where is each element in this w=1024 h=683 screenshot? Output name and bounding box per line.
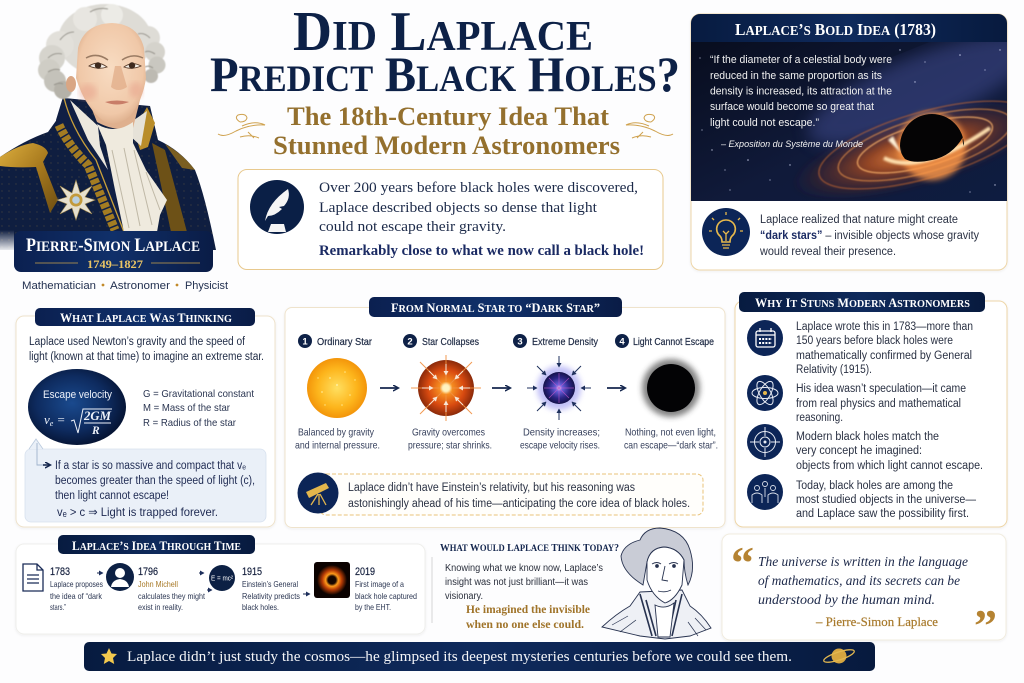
subtitle: The 18th-Century Idea That (287, 102, 609, 131)
engraving: Laplace sketch (602, 528, 711, 639)
space image with black hole (691, 42, 1007, 201)
arrow 1 (380, 387, 398, 389)
consequence callout: vₑ > c ⇒ Light is trapped forever. (57, 505, 218, 519)
step 1: ordinary star: 1 (302, 336, 308, 348)
panel: quote (722, 534, 1006, 651)
icon: light bulb (702, 208, 750, 256)
reason 4 (796, 480, 976, 520)
intro text: Over 200 years before black holes were discovered, (319, 180, 638, 196)
variables legend: G = Gravitational constant (143, 388, 254, 400)
flourish left (218, 114, 265, 138)
quote: “If the diameter of a celestial body were (710, 54, 892, 66)
dark stars text: would reveal their presence. (759, 246, 896, 258)
escape velocity formula: v (44, 412, 50, 427)
nose and mouth (111, 66, 127, 90)
step 3: extreme density: 3 (517, 336, 523, 348)
step 1: ordinary star: Balanced by gravity (298, 426, 375, 438)
heading pill: LAPLACE’S IDEA THROUGH TIME (72, 539, 241, 553)
1915 milestone (242, 566, 300, 612)
cravat (97, 122, 167, 232)
card header: LAPLACE’S BOLD IDEA (1783) (735, 20, 936, 39)
icon: John Michell silhouette (106, 563, 134, 591)
closing quote mark: ” (974, 600, 997, 651)
gold sash (152, 143, 187, 232)
title: PREDICT BLACK HOLES? (210, 46, 680, 102)
dark stars text: “dark stars” – invisible objects whose gravity (760, 230, 979, 242)
reason 1: mathematically confirmed by General (796, 350, 972, 362)
section: what would Laplace think today (432, 542, 619, 631)
panel: why it stuns modern astronomers (735, 292, 1007, 527)
reason 4: most studied objects in the universe— (796, 494, 976, 506)
title (210, 1, 680, 102)
icon: E = mc squared (209, 565, 235, 591)
icon: star (101, 648, 117, 664)
step 4: light cannot escape: can escape—“dark star”. (624, 440, 718, 452)
1915 milestone: Einstein’s General (242, 579, 298, 589)
step 4: light cannot escape: Light Cannot Escape (633, 336, 714, 348)
escape velocity formula (28, 369, 126, 445)
card header (691, 14, 1007, 42)
quote: reduced in the same proportion as its (710, 70, 883, 82)
consequence callout: then light cannot escape! (55, 490, 169, 502)
icon: target (747, 424, 783, 460)
step 2: star collapses (403, 334, 492, 452)
step 4: light cannot escape: 4 (619, 336, 625, 348)
name banner (14, 231, 213, 272)
arrow 3 (607, 387, 625, 389)
roles line: Mathematician (22, 280, 96, 292)
icon: E = mc squared: E = mc² (211, 576, 234, 582)
medal (57, 180, 95, 220)
eyes (89, 63, 141, 68)
dark stars text (759, 214, 979, 258)
reason 4: and Laplace saw the possibility first. (796, 508, 969, 520)
panel: Laplace's bold idea (691, 14, 1024, 270)
reason 3: Modern black holes match the (796, 431, 939, 443)
intro text: Laplace described objects so dense that light (319, 200, 598, 216)
subtitle (273, 102, 620, 160)
step 1: ordinary star (295, 334, 380, 452)
step 4: light cannot escape: Nothing, not even light, (625, 426, 716, 438)
1796 milestone: calculates they might (138, 591, 206, 601)
2019 milestone: First image of a (355, 579, 404, 589)
step 2: star collapses: pressure; star shrinks. (408, 440, 492, 452)
escape velocity formula: R (91, 425, 100, 437)
quote text: of mathematics, and its secrets can be (758, 574, 960, 589)
quote text (758, 555, 968, 608)
quote: – Exposition du Système du Monde (720, 139, 863, 150)
title: DID LAPLACE (293, 1, 593, 63)
reason 2 (796, 383, 966, 424)
1915 milestone: 1915 (242, 566, 262, 578)
icon: quill and inkwell (250, 180, 304, 234)
heading pill (369, 297, 622, 317)
portrait: Laplace (0, 4, 216, 252)
right collar (134, 107, 155, 150)
1796 milestone: exist in reality. (138, 602, 183, 612)
icon: telescope (298, 472, 338, 514)
escape velocity formula: = (53, 412, 65, 427)
face (76, 23, 146, 124)
panel: from normal star to dark star (285, 297, 725, 528)
intro callout (238, 170, 663, 270)
arrow (97, 572, 103, 574)
telescope callout (298, 472, 703, 515)
flourish right (626, 114, 673, 138)
roles line: Astronomer (110, 280, 170, 292)
body (445, 563, 603, 602)
highlight (466, 602, 591, 631)
1796 milestone: John Michell (138, 579, 178, 589)
reason 4: Today, black holes are among the (796, 480, 953, 492)
arrow (199, 572, 204, 574)
panel: idea through time (16, 535, 425, 634)
arrow (303, 593, 310, 595)
heading pill: WHY IT STUNS MODERN ASTRONOMERS (755, 296, 970, 310)
glow around event horizon (898, 112, 966, 180)
reason 3: objects from which light cannot escape. (796, 460, 983, 472)
roles line: Physicist (185, 280, 228, 292)
1783 milestone (50, 566, 103, 612)
icon: people observing (747, 474, 783, 510)
hair (38, 4, 166, 99)
neck (85, 92, 142, 129)
quote: light could not escape.” (710, 117, 819, 129)
quote text: understood by the human mind. (758, 593, 935, 608)
reason 1: Relativity (1915). (796, 364, 872, 376)
reason 2: from real physics and mathematical (796, 398, 961, 410)
subtitle: Stunned Modern Astronomers (273, 131, 620, 160)
reason 3 (796, 431, 983, 472)
1915 milestone: Relativity predicts (242, 591, 300, 601)
1796 milestone: 1796 (138, 566, 158, 578)
dark stars text: Laplace realized that nature might create (760, 214, 958, 226)
1915 milestone: black holes. (242, 602, 279, 612)
step 4: light cannot escape (615, 334, 718, 452)
intro paragraph (29, 336, 264, 363)
2019 milestone: 2019 (355, 566, 375, 578)
attribution: – Pierre-Simon Laplace (815, 615, 938, 629)
highlight: He imagined the invisible (466, 602, 591, 616)
quote: surface would become so great that (710, 101, 874, 113)
variables legend: R = Radius of the star (143, 417, 236, 429)
intro paragraph: light (known at that time) to imagine an extreme star. (29, 351, 264, 363)
consequence callout: becomes greater than the speed of light (c), (55, 475, 255, 487)
step 2: star collapses: 2 (407, 336, 413, 348)
variables legend (143, 388, 254, 429)
1783 milestone: Laplace proposes (50, 579, 103, 589)
panel: what Laplace was thinking (16, 308, 275, 527)
reason 3: very concept he imagined: (796, 445, 922, 457)
consequence callout: If a star is so massive and compact that vₑ (55, 460, 246, 472)
shirt collar wing (70, 100, 108, 170)
icon: atom (747, 375, 783, 411)
step 1: ordinary star: Ordinary Star (317, 336, 372, 348)
step 3: extreme density: Extreme Density (532, 336, 599, 348)
embroidered collar (56, 97, 128, 232)
heading pill (35, 308, 255, 326)
1796 milestone (138, 566, 206, 612)
dates: 1749–1827 (87, 259, 143, 271)
reason 1: Laplace wrote this in 1783—more than (796, 321, 973, 333)
ear (66, 76, 76, 92)
step 2: star collapses: Gravity overcomes (412, 426, 485, 438)
1783 milestone: the idea of “dark (50, 591, 103, 601)
arrow (207, 589, 212, 591)
heading pill: WHAT LAPLACE WAS THINKING (60, 311, 232, 325)
heading pill (739, 292, 985, 312)
step 3: extreme density: Density increases; (523, 426, 600, 438)
body: insight was not just brilliant—it was (445, 577, 588, 588)
reason 2: reasoning. (796, 412, 843, 424)
telescope callout: Laplace didn’t have Einstein’s relativity, but his reasoning was (348, 482, 635, 494)
body: Knowing what we know now, Laplace’s (445, 563, 603, 574)
quote text: The universe is written in the language (758, 555, 968, 570)
highlight: when no one else could. (466, 617, 584, 631)
arrow 2 (492, 387, 510, 389)
escape velocity formula: e (50, 419, 54, 428)
image: first black hole picture (314, 562, 350, 598)
heading: WHAT WOULD LAPLACE THINK TODAY? (440, 542, 619, 554)
coat (0, 98, 216, 250)
roles line (22, 280, 228, 292)
intro paragraph: Laplace used Newton’s gravity and the speed of (29, 336, 246, 348)
2019 milestone (355, 566, 417, 612)
opening quote mark: “ (731, 537, 754, 588)
reason 1: 150 years before black holes were (796, 335, 953, 347)
intro text: Remarkably close to what we now call a black hole! (319, 243, 644, 259)
escape velocity formula: Escape velocity (43, 389, 112, 401)
bottom banner (84, 642, 875, 671)
consequence callout (25, 439, 266, 522)
1783 milestone: stars.” (50, 602, 66, 612)
icon: saturn (823, 647, 855, 665)
heading pill (58, 535, 255, 554)
intro text: could not escape their gravity. (319, 219, 506, 235)
icon: document (23, 564, 43, 591)
intro text (319, 180, 644, 259)
quote (710, 54, 892, 150)
variables legend: M = Mass of the star (143, 402, 230, 414)
step 1: ordinary star: and internal pressure. (295, 440, 380, 452)
name: PIERRE-SIMON LAPLACE (26, 236, 200, 256)
step 3: extreme density (513, 334, 600, 452)
banner text: Laplace didn’t just study the cosmos—he glimpsed its deepest mysteries centuries before we could see them. (127, 649, 792, 665)
reason 1 (796, 321, 973, 376)
escape velocity formula: 2GM (83, 409, 112, 423)
epaulette (0, 143, 58, 213)
2019 milestone: black hole captured (355, 591, 417, 601)
step 3: extreme density: escape velocity rises. (520, 440, 600, 452)
1783 milestone: 1783 (50, 566, 70, 578)
quote: density is increased, its attraction at the (710, 86, 892, 98)
2019 milestone: by the EHT. (355, 602, 391, 612)
heading pill: FROM NORMAL STAR TO “DARK STAR” (391, 300, 600, 315)
telescope callout: astonishingly ahead of his time—anticipating the core idea of black holes. (348, 498, 690, 510)
reason 2: His idea wasn’t speculation—it came (796, 383, 966, 395)
step 2: star collapses: Star Collapses (422, 336, 479, 348)
body: visionary. (445, 591, 483, 602)
icon: calendar (747, 320, 783, 356)
